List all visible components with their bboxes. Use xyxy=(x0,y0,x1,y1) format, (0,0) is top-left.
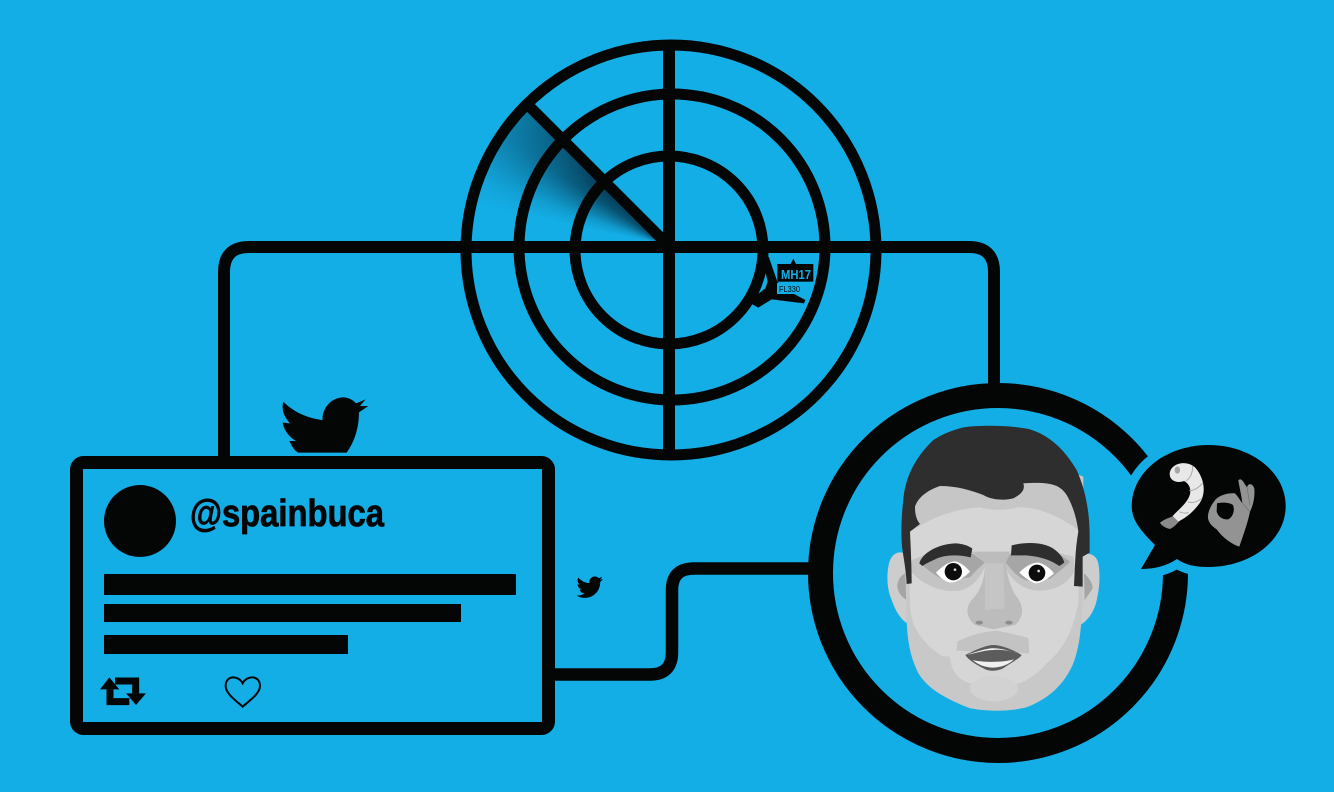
eye sockets xyxy=(910,552,986,591)
mouth xyxy=(965,645,1022,671)
handle: @spainbuca xyxy=(190,493,385,535)
icon: retweet xyxy=(100,677,146,705)
face light area xyxy=(907,500,1080,684)
chin xyxy=(970,676,1018,701)
tweet card xyxy=(76,462,548,728)
icon: shrimp xyxy=(1160,463,1204,529)
plane marker MH17 FL330 xyxy=(752,257,813,308)
tweet text bars xyxy=(104,574,516,654)
bubble body xyxy=(1132,445,1286,569)
plane marker MH17 FL330: MH17 xyxy=(781,268,811,282)
face base xyxy=(903,443,1083,711)
bubble halo xyxy=(1132,445,1286,569)
upper forehead shade xyxy=(910,483,1080,532)
avatar xyxy=(104,485,176,557)
right ear xyxy=(1081,554,1099,625)
eyes xyxy=(936,561,970,583)
speech bubble xyxy=(1132,445,1286,569)
eyebrows xyxy=(919,543,972,566)
upper lip shade xyxy=(957,631,1029,653)
left ear xyxy=(887,552,907,623)
icon: ok hand xyxy=(1208,479,1254,547)
radar sweep shadow xyxy=(482,112,656,241)
portrait ring xyxy=(820,396,1176,750)
hair xyxy=(901,426,1090,587)
radar xyxy=(466,40,876,456)
portrait face xyxy=(887,426,1099,711)
plane marker MH17 FL330: FL330 xyxy=(779,284,800,294)
connector: card to portrait xyxy=(555,568,815,674)
icon: large twitter bird xyxy=(283,397,368,453)
icon: small twitter bird xyxy=(576,576,603,598)
nose xyxy=(967,552,1022,629)
icon: heart xyxy=(226,677,260,707)
connector: card to radar to portrait xyxy=(224,247,994,460)
